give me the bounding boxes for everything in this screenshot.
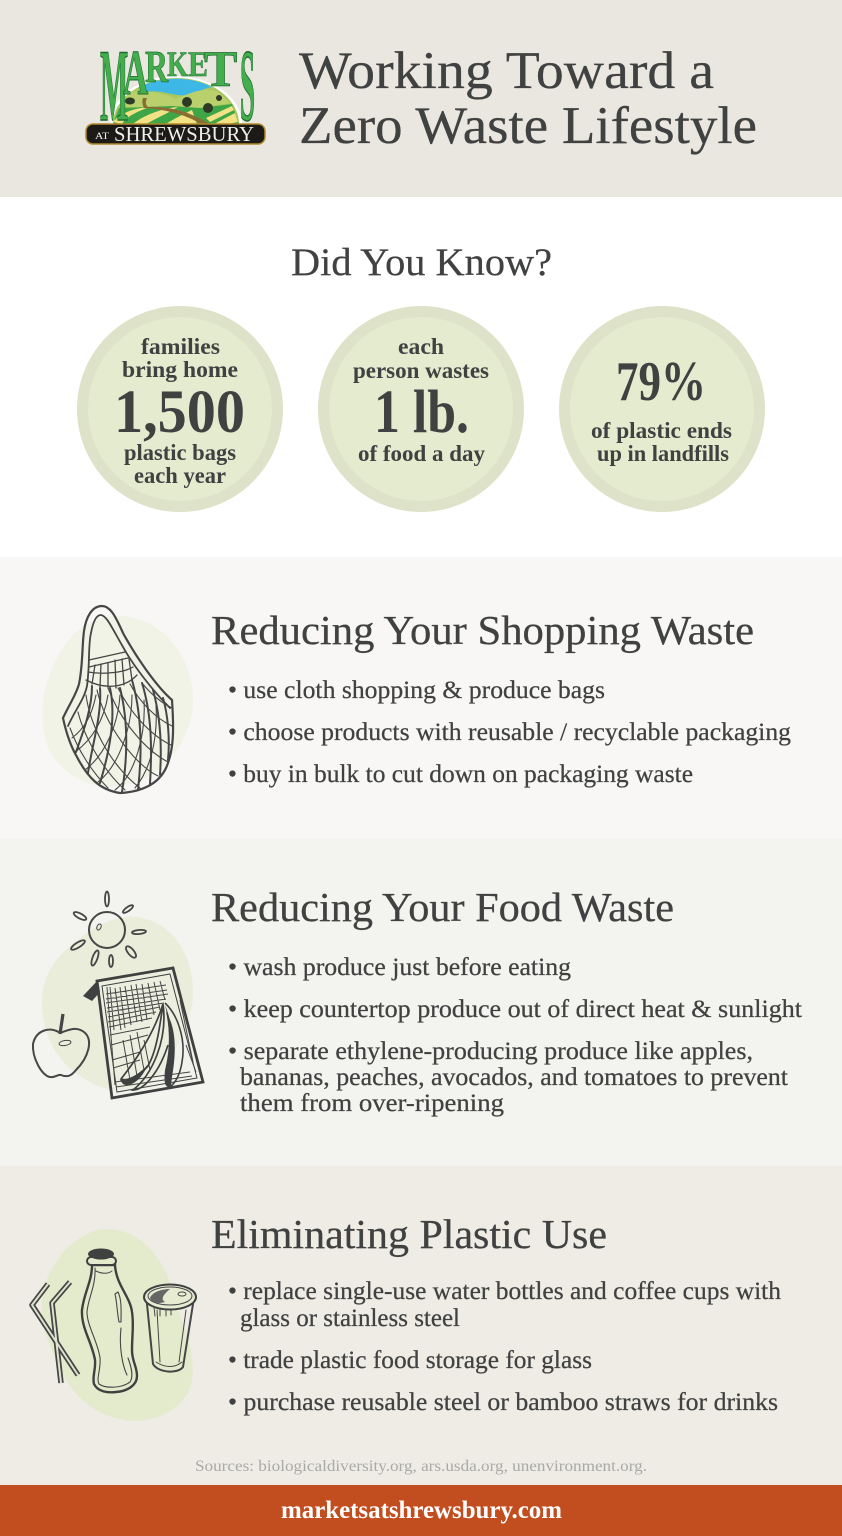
list: plastic tips (228, 1278, 782, 1416)
list: plastic tips: glass or stainless steel (240, 1305, 460, 1332)
logo banner: SHREWSBURY (114, 122, 254, 146)
stat circle: 1,500 plastic bags: 1,500 (114, 379, 245, 446)
list: shopping tips: • buy in bulk to cut down on packaging waste (228, 761, 693, 788)
list: plastic tips: • purchase reusable steel or bamboo straws for drinks (228, 1389, 778, 1416)
stat circle: 1 lb. of food: each (398, 334, 444, 359)
list: food tips: • keep countertop produce out of direct heat & sunlight (228, 996, 802, 1023)
list: shopping tips: • choose products with reusable / recyclable packaging (228, 719, 792, 746)
stat circle: 1 lb. of food: of food a day (358, 441, 485, 466)
straws (32, 1282, 78, 1383)
stat circle: 1 lb. of food: 1 lb. (374, 379, 469, 446)
icon: mesh bag (42, 606, 193, 793)
stat circle: 1,500 plastic bags: each year (134, 463, 226, 488)
stat circle: 79% plastic: 79% (616, 351, 706, 413)
title (299, 42, 757, 155)
logo wordmark (100, 29, 255, 143)
heading: eliminating plastic: Eliminating Plastic Use (211, 1211, 607, 1257)
list: plastic tips: • trade plastic food storage for glass (228, 1347, 592, 1374)
logo wordmark: R (145, 43, 169, 92)
stat circle: 79% plastic (559, 306, 765, 512)
heading: food waste: Reducing Your Food Waste (211, 884, 674, 930)
list: food tips: them from over-ripening (240, 1090, 505, 1117)
logo wordmark: A (123, 40, 148, 109)
sources: Sources: biologicaldiversity.org, ars.usda.org, unenvironment.org. (195, 1458, 647, 1475)
list: food tips: bananas, peaches, avocados, and tomatoes to prevent (240, 1064, 788, 1091)
stat circle: 79% plastic: of plastic ends (591, 418, 732, 443)
stat circle: 1,500 plastic bags: families (141, 334, 220, 359)
list: food tips: • separate ethylene-producing produce like apples, (228, 1038, 753, 1065)
icon: straws, bottle, cup (32, 1229, 196, 1421)
stat circle: 1 lb. of food (318, 306, 524, 512)
logo banner: AT (95, 131, 110, 141)
panel: reducing shopping waste (0, 557, 842, 838)
logo wordmark: K (167, 44, 188, 84)
cup (144, 1284, 196, 1372)
logo wordmark: T (204, 41, 237, 97)
logo wordmark: E (188, 44, 208, 85)
list: food tips (228, 954, 802, 1117)
heading: shopping waste: Reducing Your Shopping Waste (211, 607, 754, 653)
stat circle: 79% plastic: up in landfills (597, 441, 729, 466)
footer website: marketsatshrewsbury.com (281, 1497, 562, 1524)
logo wordmark: S (240, 30, 255, 143)
panel: reducing food waste (0, 838, 842, 1166)
title: Zero Waste Lifestyle (299, 97, 757, 155)
list: shopping tips (228, 677, 792, 788)
icon: produce, sun, apple (33, 892, 203, 1098)
logo wordmark: M (100, 29, 128, 143)
list: food tips: • wash produce just before eating (228, 954, 572, 981)
bottle (82, 1248, 137, 1392)
stat circle: 1,500 plastic bags: bring home (122, 357, 238, 382)
panel: eliminating plastic (0, 1166, 842, 1485)
stat circle: 1,500 plastic bags (77, 306, 283, 512)
panel: did you know (0, 197, 842, 557)
heading: did you know: Did You Know? (291, 241, 552, 284)
panel: header (0, 0, 842, 197)
stat circle: 1,500 plastic bags: plastic bags (124, 440, 236, 465)
list: shopping tips: • use cloth shopping & produce bags (228, 677, 605, 704)
footer bar (0, 1485, 842, 1536)
stat circle: 1 lb. of food: person wastes (353, 358, 489, 383)
list: plastic tips: • replace single-use water bottles and coffee cups with (228, 1278, 782, 1305)
logo: Markets at Shrewsbury (86, 29, 265, 146)
title: Working Toward a (299, 42, 714, 100)
